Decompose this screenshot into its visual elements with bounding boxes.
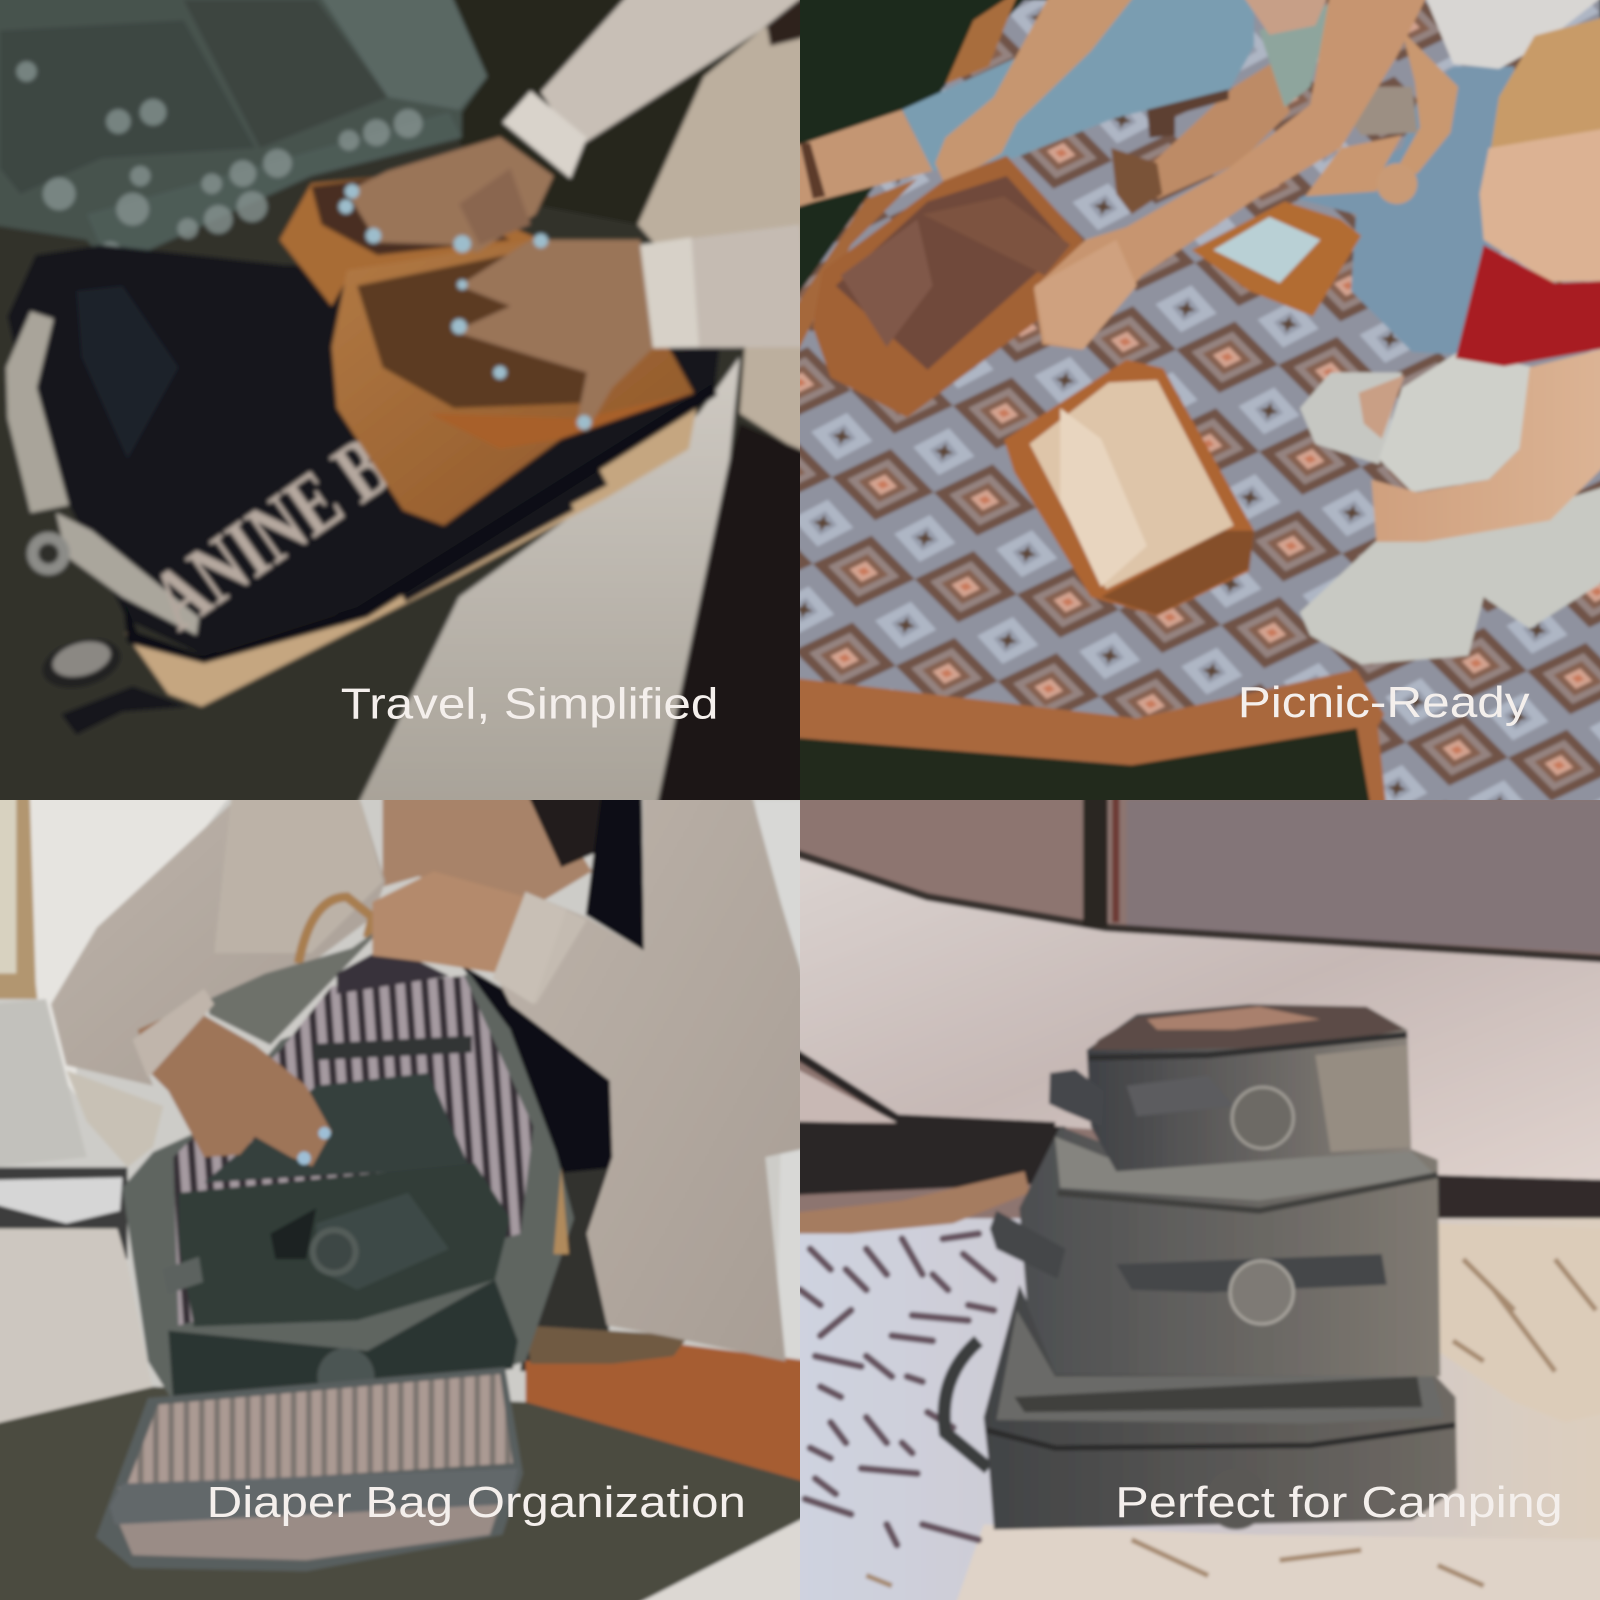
chest and hair	[383, 790, 592, 902]
child's hair and face	[1489, 15, 1600, 163]
middle cube	[1019, 1127, 1440, 1377]
sweater lettering: ANINE B	[134, 417, 407, 648]
tent seams	[790, 851, 1600, 959]
wheel	[37, 631, 126, 696]
floral print	[800, 1234, 994, 1545]
sleeves	[541, 0, 811, 148]
cuffs and sleeve	[133, 989, 214, 1078]
scene: woman packing a backpack	[0, 790, 811, 1600]
backpack shell	[122, 973, 574, 1402]
baby	[1152, 61, 1290, 199]
window frame	[0, 790, 39, 999]
child's clothes and arm	[1300, 372, 1402, 464]
hands	[138, 1007, 332, 1166]
backpack lid	[209, 922, 388, 1045]
adult's leg and sandal	[790, 110, 933, 209]
caption: Picnic-Ready: Picnic-Ready	[1238, 678, 1530, 727]
caption: Travel, Simplified: Travel, Simplified	[341, 679, 718, 728]
hands	[347, 137, 654, 431]
scene: family on a picnic blanket	[790, 0, 1600, 811]
zipper pull	[554, 1167, 569, 1254]
orange throw	[526, 1341, 811, 1499]
suitcase interior and sweater	[8, 245, 719, 656]
panel: diaper bag organization	[0, 800, 800, 1600]
quilt	[790, 1218, 1600, 1600]
caption: Diaper Bag Organization: Diaper Bag Organization	[207, 1478, 746, 1527]
open lid lining	[0, 0, 487, 268]
large orange cube	[332, 240, 694, 526]
white shirt	[1422, 0, 1600, 69]
tent wall	[790, 856, 1600, 1180]
blanket	[790, 0, 1600, 811]
diaper cube	[1004, 360, 1254, 616]
olive blanket	[0, 1387, 811, 1600]
cardigan	[495, 790, 811, 1361]
adult's reaching arm	[1034, 0, 1430, 349]
wipes cube	[1192, 202, 1361, 316]
stacked pouches	[204, 1073, 469, 1183]
small orange cube	[280, 176, 541, 306]
panel: perfect for camping	[800, 800, 1600, 1600]
panel: picnic-ready	[800, 0, 1600, 800]
middle cube handle	[990, 1211, 1065, 1279]
bottom cube	[984, 1285, 1457, 1530]
top cube	[1087, 1004, 1411, 1171]
adult's jeans	[902, 0, 1254, 171]
black top	[586, 790, 644, 951]
bottom cube handle	[944, 1341, 989, 1468]
suitcase hull	[125, 408, 696, 707]
blanket borders	[790, 669, 1384, 765]
suitcase handle	[337, 474, 602, 615]
striped lining	[173, 976, 533, 1326]
scene: open suitcase on a bed	[0, 0, 811, 811]
lamp and furniture	[30, 790, 235, 1096]
backpack top handle	[298, 897, 372, 963]
tan bag strap	[526, 1326, 689, 1364]
tent base	[790, 1121, 1065, 1195]
dark gap beneath top	[520, 1152, 617, 1371]
panel: travel, simplified	[0, 0, 800, 800]
front mesh flap	[96, 1367, 523, 1571]
scene: stacked cubes in front of a tent	[790, 790, 1600, 1600]
grey straps	[6, 311, 69, 513]
adult's left arm	[935, 0, 1139, 186]
large clear cube	[813, 156, 1083, 417]
caption: Perfect for Camping: Perfect for Camping	[1115, 1478, 1563, 1527]
top cube handle	[1049, 1069, 1104, 1127]
